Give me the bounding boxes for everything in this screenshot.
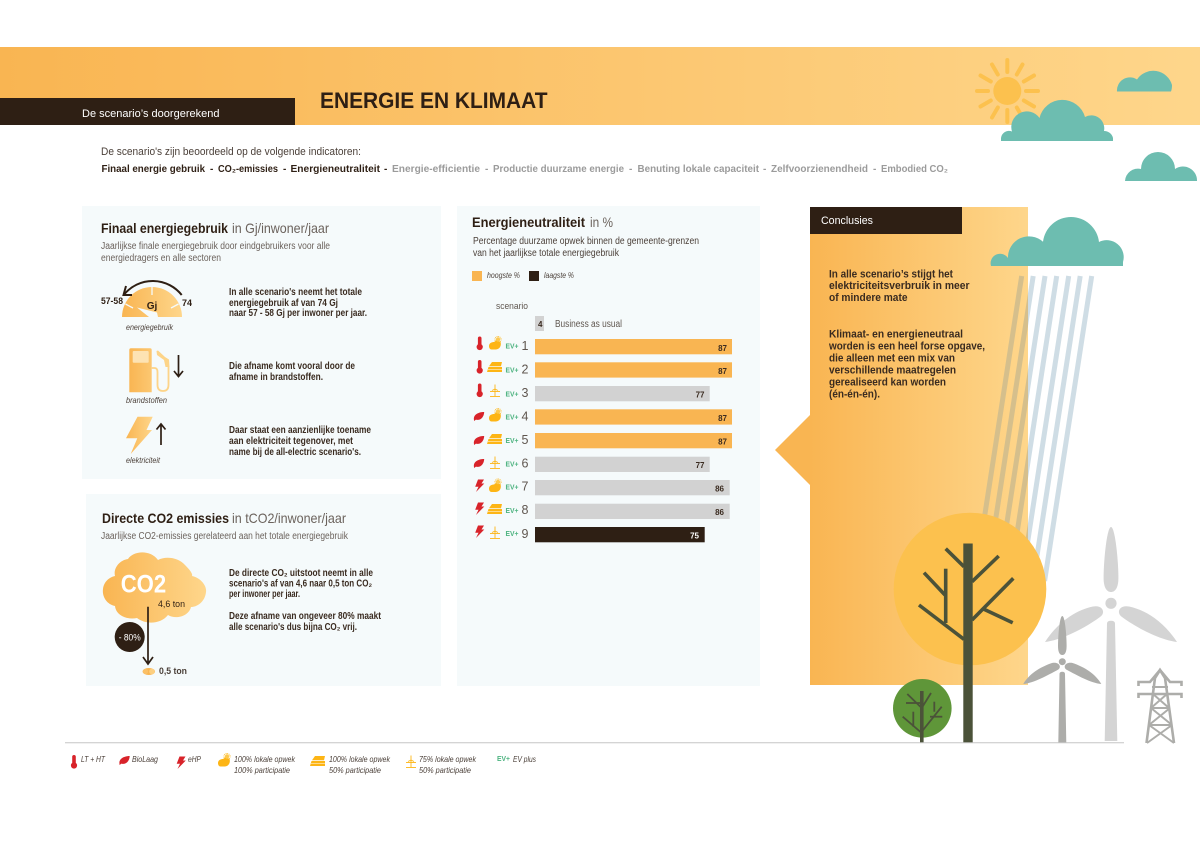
row 5: EV+ [506,436,519,445]
intro text: Embodied CO₂ [881,164,948,175]
icon: CO2 cloud: CO2 [121,570,166,598]
legend: BioLaag: BioLaag [132,754,158,764]
heading: directe CO2 emissies [102,510,346,526]
row 2: 2 [522,362,529,376]
header tab: De scenario’s doorgerekend [82,108,220,120]
icon: rain cloud [991,217,1124,266]
row 1: 1 [522,339,529,353]
text: elektriciteit: name bij de all-electric scenario's. [229,447,361,458]
text: CO2: De directe CO₂ uitstoot neemt in alle [229,568,373,579]
intro text: - [283,164,286,175]
legend: eHP: eHP [188,754,201,764]
heading: energieneutraliteit: Energieneutraliteit [472,214,585,230]
chart legend: hoogste % [487,270,520,280]
panel: directe CO2 emissies [86,494,441,686]
header tab [0,98,295,125]
text: totale energiegebruik: naar 57 - 58 Gj per inwoner per jaar. [229,308,367,319]
row 4: EV+ [506,412,519,422]
legend: LT + HT [71,754,106,769]
intro text: - [873,164,876,175]
text: elektriciteit [229,425,371,458]
subheading: energiedragers en alle sectoren [101,253,221,264]
heading: directe CO2 emissies: in tCO2/inwoner/jaar [232,510,346,526]
bar chart: Business as usual [555,319,622,330]
icon: gauge: 74 [182,298,193,309]
title: ENERGIE EN KLIMAAT [320,88,548,113]
conclusion 2: gerealiseerd kan worden [829,376,946,388]
conclusion 2: verschillende maatregelen [829,364,956,376]
intro text: Benuting lokale capaciteit [638,164,760,175]
heading: directe CO2 emissies: Directe CO2 emissies [102,510,229,526]
row 9: EV+ [506,529,519,538]
legend: 100% lokale opwek 50% participatie: 50% participatie [329,765,381,775]
panel: energieneutraliteit [457,206,760,686]
heading: finaal energiegebruik: in Gj/inwoner/jaar [232,220,329,236]
row 4: 4 [522,410,529,424]
row 1: 87 [718,344,728,353]
row 7 [475,479,730,495]
panel: conclusies [775,207,1028,685]
legend: 100% lokale opwek 50% participatie: 100% lokale opwek [329,754,391,764]
chart legend [472,270,574,281]
legend: BioLaag [119,754,158,765]
bar chart: 4 [538,320,543,329]
row 7: EV+ [506,482,519,492]
legend: 75% lokale opwek 50% participatie [406,754,477,775]
row 6: EV+ [506,460,519,468]
text: totale energiegebruik: In alle scenario's neemt het totale [229,287,362,298]
heading: energieneutraliteit: in % [590,214,613,230]
baseline [65,742,1124,744]
panel: finaal energiegebruik [82,206,441,479]
row 9 [475,526,705,542]
row 7: 86 [715,484,725,494]
row 5 [474,433,732,448]
text: totale energiegebruik [229,287,367,319]
row 9: 75 [690,532,700,540]
chart legend: laagste % [544,270,574,280]
row 8: EV+ [506,506,519,515]
intro text: De scenario's zijn beoordeeld op de volgende indicatoren: [101,146,361,158]
heading: finaal energiegebruik [101,220,329,236]
intro text: CO₂-emissies [218,164,278,175]
legend: 100% lokale opwek 50% participatie [310,754,391,775]
intro text: Productie duurzame energie [493,164,624,175]
row 6: 77 [696,461,705,470]
intro text: Finaal energie gebruik [102,164,205,175]
row 7: 7 [522,480,529,494]
bar chart [474,301,732,542]
intro text: Zelfvoorzienendheid [771,164,868,175]
icon: CO2 cloud [103,552,206,623]
bar chart: scenario [496,301,528,312]
text: brandstoffen [229,361,355,383]
text: brandstoffen: afname in brandstoffen. [229,372,323,383]
arrow: reduction [115,607,153,664]
icon: small cloud [143,666,187,677]
subheading [473,236,699,259]
row 1: EV+ [506,342,519,350]
legend: LT + HT: LT + HT [81,754,106,764]
icon: rain [975,276,1092,581]
legend: EV plus: EV plus [513,754,537,764]
intro text: - [485,164,488,175]
row 3 [477,384,710,401]
row 4: 87 [718,414,728,423]
icon: gauge [101,281,193,332]
icon: CO2 cloud: 4,6 ton [158,599,185,610]
conclusion 1 [829,268,970,304]
legend: 75% lokale opwek 50% participatie: 75% lokale opwek [419,754,477,764]
icon: power pylon [1138,670,1182,743]
text: elektriciteit: aan elektriciteit tegenover, met [229,436,354,447]
row 8: 86 [715,508,725,517]
row 6 [474,456,710,472]
conclusies header [810,207,962,234]
subheading: Jaarlijkse finale energiegebruik door eindgebruikers voor alle [101,241,330,252]
icon: small tree [893,679,952,743]
row 3: 3 [522,386,529,400]
icon: large wind turbine [1045,527,1177,741]
legend: EV plus: EV+ [497,754,511,763]
text: CO2: Deze afname van ongeveer 80% maakt [229,611,382,622]
conclusion 2 [828,328,985,400]
text: elektriciteit: Daar staat een aanzienlijke toename [229,425,371,436]
intro text [101,146,948,175]
row 3: 77 [696,390,705,400]
legend: EV plus [497,754,537,764]
row 3: EV+ [506,390,519,398]
icon: cloud middle [1001,100,1113,141]
intro text: - [210,164,213,175]
row 8 [475,502,730,519]
row 6: 6 [522,456,529,470]
text: brandstoffen: Die afname komt vooral door de [229,361,355,372]
icon: small wind turbine [1023,616,1101,743]
icon: cloud top right [1117,71,1172,92]
intro text: Energieneutraliteit [290,164,381,175]
legend: 100% lokale opwek 100% participatie [218,753,296,775]
conclusion 1: of mindere mate [829,292,908,304]
icon: gauge: Gj [147,301,157,312]
intro text: - [763,164,766,175]
text: CO2 [229,568,382,633]
subheading: Percentage duurzame opwek binnen de gemeente-grenzen [473,236,699,247]
text: CO2: alle scenario's dus bijna CO₂ vrij. [229,622,357,633]
conclusies header: Conclusies [821,215,873,227]
subheading [101,241,330,264]
legend: 100% lokale opwek 100% participatie: 100% lokale opwek [234,754,296,764]
row 5: 5 [522,433,529,447]
icon: large tree [894,513,1046,743]
legend: 75% lokale opwek 50% participatie: 50% participatie [419,765,471,775]
arrow: reduction: - 80% [119,632,141,642]
icon: small cloud: 0,5 ton [159,666,187,677]
icon: fuel pump [126,348,183,405]
icon: lightning bolt: elektriciteit [126,455,161,465]
icon: gauge: energiegebruik [126,322,174,332]
legend [71,753,537,775]
intro text: - [629,164,632,175]
subheading: van het jaarlijkse totale energiegebruik [473,248,620,259]
icon: sun [977,60,1038,122]
icon: cloud right [1125,152,1197,181]
row 1 [477,336,732,354]
legend: eHP [177,754,201,769]
row 2 [477,360,732,378]
heading: finaal energiegebruik: Finaal energiegebruik [101,220,228,236]
conclusion 1: elektriciteitsverbruik in meer [829,280,970,292]
icon: fuel pump: brandstoffen [126,395,167,405]
intro text: - [384,164,387,175]
conclusion 2: die alleen met een mix van [829,352,955,364]
conclusion 2: (én-én-én). [829,388,880,400]
text: CO2: per inwoner per jaar. [229,589,300,600]
row 9: 9 [522,527,529,541]
icon: lightning bolt [126,417,166,465]
conclusion 2: Klimaat- en energieneutraal [829,328,963,340]
legend: 100% lokale opwek 100% participatie: 100% participatie [234,765,290,775]
subheading: Jaarlijkse CO2-emissies gerelateerd aan het totale energiegebruik [101,531,349,542]
conclusion 1: In alle scenario’s stijgt het [829,268,953,280]
text: totale energiegebruik: energiegebruik af van 74 Gj [229,298,338,309]
header band [0,47,1200,125]
row 4 [474,408,732,425]
intro text: Energie-efficientie [392,164,480,175]
row 8: 8 [522,503,529,517]
row 2: 87 [718,367,728,376]
row 5: 87 [718,438,728,446]
text: CO2: scenario's af van 4,6 naar 0,5 ton CO₂ [229,578,372,590]
row 2: EV+ [506,366,519,374]
icon: gauge: 57-58 [101,296,123,307]
conclusion 2: worden is een heel forse opgave, [828,340,985,352]
